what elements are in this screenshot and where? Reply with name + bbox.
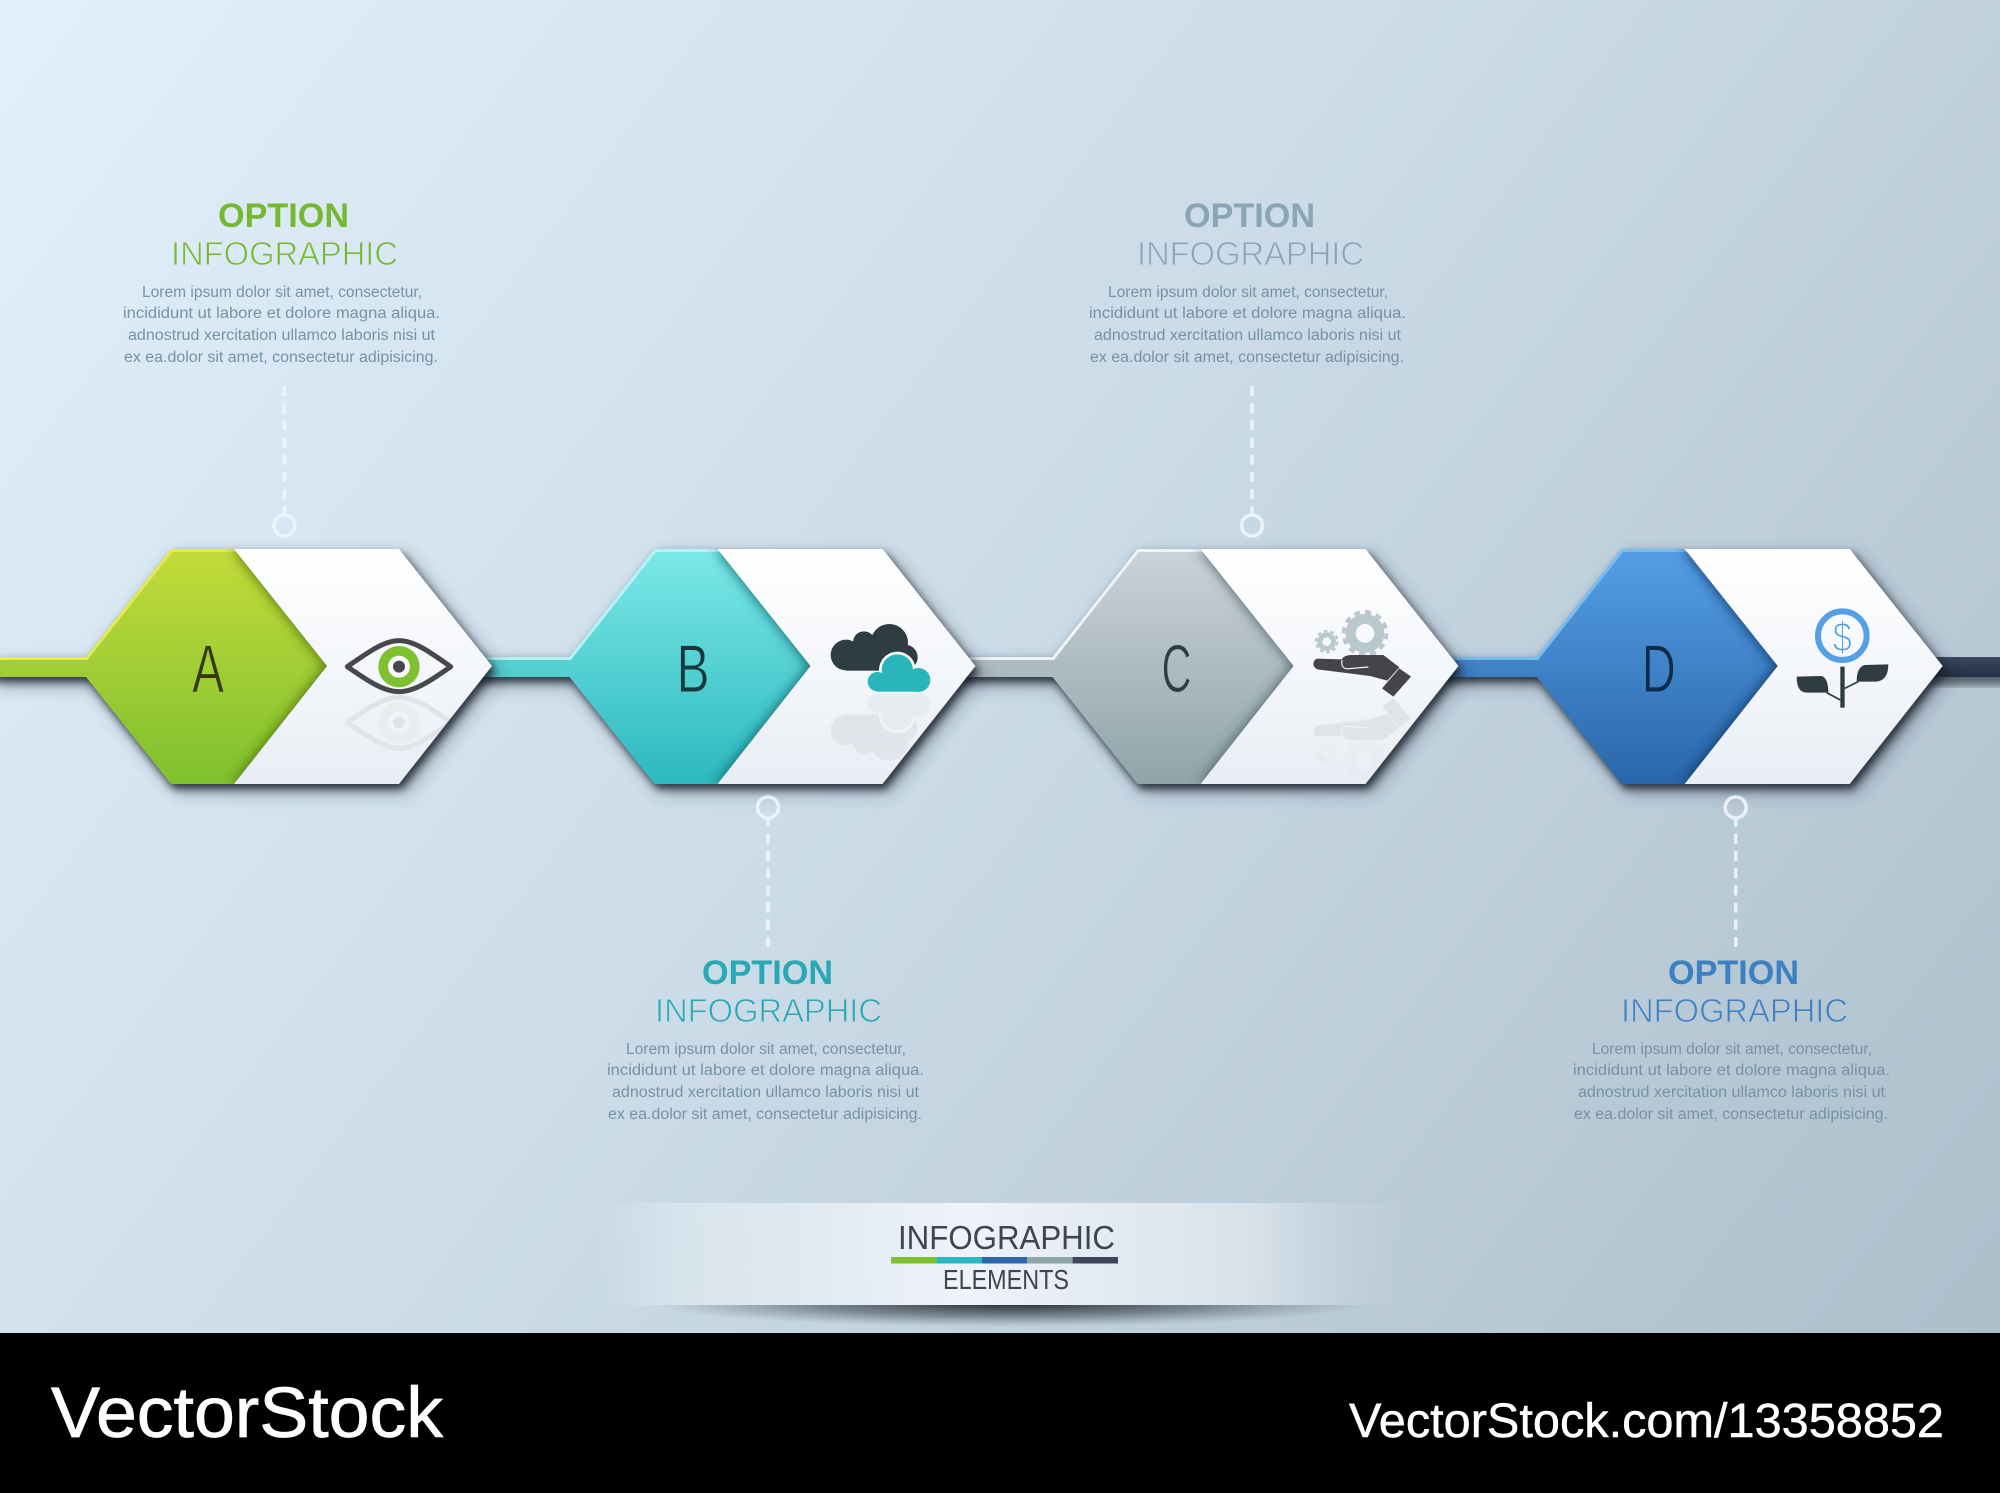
text block D (1573, 954, 1890, 1123)
step B hexagon (474, 549, 982, 792)
step C hexagon (956, 549, 1466, 792)
text block A: INFOGRAPHIC (171, 235, 398, 272)
icon reflection: clouds (831, 693, 930, 761)
colour bar (891, 1257, 1118, 1264)
text block C: INFOGRAPHIC (1137, 235, 1364, 272)
text block C: incididunt ut labore et dolore magna aliqua. (1089, 305, 1406, 322)
ribbon subtitle: ELEMENTS (943, 1264, 1069, 1295)
connector C: dashed line with ring (1242, 386, 1262, 536)
text block C: ex ea.dolor sit amet, consectetur adipisicing. (1090, 349, 1404, 366)
ribbon shadow (672, 1305, 1346, 1326)
text block A: ex ea.dolor sit amet, consectetur adipisicing. (124, 349, 438, 366)
connector B: dashed line with ring (758, 797, 778, 947)
step D hexagon (1445, 545, 1952, 804)
text block A: Lorem ipsum dolor sit amet, consectetur, (142, 284, 422, 301)
text block C: OPTION (1184, 197, 1315, 235)
icon: money plant: $ (1833, 614, 1852, 662)
text block A: OPTION (218, 197, 349, 235)
text block B: ex ea.dolor sit amet, consectetur adipisicing. (608, 1106, 922, 1123)
connector D: dashed line with ring (1725, 797, 1746, 947)
footer url text: VectorStock.com/13358852 (1349, 1395, 1944, 1448)
letter B: B (676, 631, 710, 707)
line tail: dark end of timeline (1930, 657, 2000, 685)
icon reflection: hand and gears (1314, 698, 1411, 740)
text block B: Lorem ipsum dolor sit amet, consectetur, (626, 1041, 906, 1058)
text block B: adnostrud xercitation ullamco laboris nisi ut (612, 1084, 920, 1101)
step A hexagon (0, 549, 499, 792)
letter D: D (1642, 631, 1676, 707)
text block B (607, 954, 924, 1123)
icon: hand holding gears (1313, 612, 1411, 697)
text block C: adnostrud xercitation ullamco laboris nisi ut (1094, 327, 1402, 344)
bottom ribbon with title (640, 1203, 1346, 1326)
text block D: INFOGRAPHIC (1621, 992, 1848, 1029)
text block C (1089, 197, 1406, 366)
icon: eye (347, 641, 451, 692)
letter A: A (192, 631, 224, 707)
text block D: Lorem ipsum dolor sit amet, consectetur, (1592, 1041, 1872, 1058)
text block B: OPTION (702, 954, 833, 992)
icon: money plant (1797, 611, 1888, 708)
text block A: adnostrud xercitation ullamco laboris nisi ut (128, 327, 436, 344)
text block D: ex ea.dolor sit amet, consectetur adipisicing. (1574, 1106, 1888, 1123)
footer band (0, 1333, 2000, 1493)
connector A: dashed line with ring (274, 386, 295, 536)
footer logo text: VectorStock (51, 1374, 444, 1453)
text block D: adnostrud xercitation ullamco laboris nisi ut (1578, 1084, 1886, 1101)
icon: clouds (831, 624, 930, 692)
text block A: incididunt ut labore et dolore magna aliqua. (123, 305, 440, 322)
text block C: Lorem ipsum dolor sit amet, consectetur, (1108, 284, 1388, 301)
text block B: INFOGRAPHIC (655, 992, 882, 1029)
ribbon title: INFOGRAPHIC (898, 1219, 1115, 1256)
letter C: C (1162, 631, 1192, 707)
text block B: incididunt ut labore et dolore magna aliqua. (607, 1062, 924, 1079)
ribbon panel (600, 1203, 1410, 1305)
text block D: incididunt ut labore et dolore magna aliqua. (1573, 1062, 1890, 1079)
text block D: OPTION (1668, 954, 1799, 992)
text block A (123, 197, 440, 366)
icon reflection: eye (347, 697, 451, 748)
